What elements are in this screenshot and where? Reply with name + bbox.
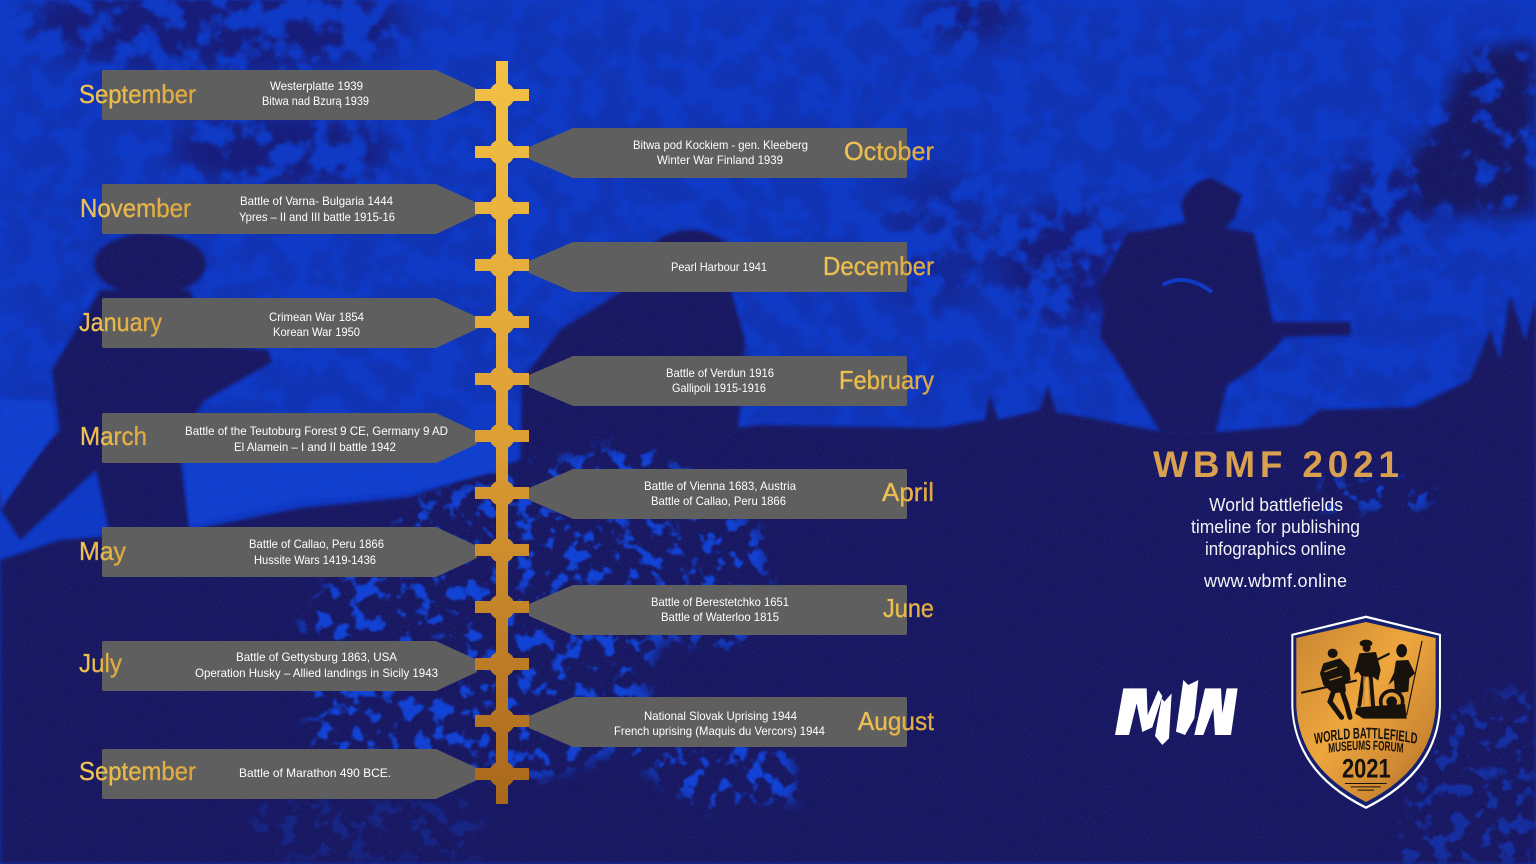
August label: French uprising (Maquis du Vercors) 1944 <box>614 724 825 738</box>
left soldier <box>1302 649 1356 717</box>
October label: Winter War Finland 1939 <box>657 153 783 167</box>
June label <box>529 585 934 635</box>
September 1939 label <box>79 70 477 120</box>
text block: description: World battlefields <box>1209 495 1343 515</box>
May label: May <box>79 536 126 566</box>
April label: Battle of Callao, Peru 1866 <box>651 494 786 508</box>
badge text: WORLD BATTLEFIELD <box>1314 728 1418 744</box>
August label: August <box>858 706 935 736</box>
June label: June <box>883 593 934 623</box>
June label: Battle of Waterloo 1815 <box>661 610 779 624</box>
October label: October <box>844 136 934 166</box>
November label: Battle of Varna- Bulgaria 1444 <box>240 194 393 208</box>
icon: three soldiers <box>1302 640 1422 719</box>
October label <box>529 128 934 178</box>
soldier silhouette: right <box>1097 178 1351 435</box>
logo: World Battlefield Museums Forum shield <box>1291 616 1441 809</box>
February label: Gallipoli 1915-1916 <box>672 381 766 395</box>
middle soldier <box>1354 640 1389 708</box>
text block: website: www.wbmf.online <box>1203 571 1347 591</box>
February label: February <box>839 365 934 395</box>
soldier silhouette: centre <box>520 230 745 470</box>
logo: MIN <box>1115 680 1238 745</box>
June label: Battle of Berestetchko 1651 <box>651 595 789 609</box>
text block: description: timeline for publishing <box>1191 517 1360 537</box>
September BCE label: Battle of Marathon 490 BCE. <box>239 766 391 780</box>
text block: description <box>1191 495 1360 559</box>
September 1939 label: Bitwa nad Bzurą 1939 <box>262 94 369 108</box>
sky clouds <box>0 0 1536 430</box>
September BCE label: September <box>79 756 196 786</box>
timeline spine with nodes <box>475 61 529 804</box>
January label <box>79 298 477 348</box>
April label <box>529 469 934 519</box>
August label: National Slovak Uprising 1944 <box>644 709 797 723</box>
September BCE label <box>79 749 477 799</box>
panel: right timeline labels <box>529 128 935 747</box>
shield body <box>1291 616 1441 809</box>
September 1939 label: Westerplatte 1939 <box>270 79 363 93</box>
April label: April <box>882 477 934 507</box>
December label: Pearl Harbour 1941 <box>671 260 767 274</box>
December label: December <box>823 251 934 281</box>
March label <box>80 413 477 463</box>
January label: Korean War 1950 <box>273 325 360 339</box>
dark ground and foliage <box>0 295 1536 864</box>
bright rocks and foliage <box>250 442 1536 864</box>
badge text: 2021 <box>1342 754 1391 784</box>
February label: Battle of Verdun 1916 <box>666 366 774 380</box>
badge text: MUSEUMS FORUM <box>1328 740 1404 753</box>
August label <box>529 697 935 747</box>
April label: Battle of Vienna 1683, Austria <box>644 479 796 493</box>
September 1939 label: September <box>79 79 196 109</box>
July label: Operation Husky – Allied landings in Sicily 1943 <box>195 666 438 680</box>
February label <box>529 356 934 406</box>
May label <box>79 527 477 577</box>
text block: description: infographics online <box>1205 539 1346 559</box>
October label: Bitwa pod Kockiem - gen. Kleeberg <box>633 138 808 152</box>
November label <box>80 184 477 234</box>
May label: Battle of Callao, Peru 1866 <box>249 537 384 551</box>
badge text <box>1314 728 1418 791</box>
title: WBMF 2021: WBMF 2021 <box>1153 444 1399 485</box>
November label: Ypres – II and III battle 1915-16 <box>239 210 395 224</box>
soldier silhouette: left <box>0 233 272 540</box>
December label <box>529 242 934 292</box>
July label: Battle of Gettysburg 1863, USA <box>236 650 397 664</box>
March label: El Alamein – I and II battle 1942 <box>234 440 396 454</box>
November label: November <box>80 193 191 223</box>
July label <box>79 641 477 691</box>
May label: Hussite Wars 1419-1436 <box>254 553 376 567</box>
right soldier <box>1355 641 1422 719</box>
March label: March <box>80 421 147 451</box>
panel: left timeline labels <box>79 70 477 799</box>
January label: January <box>79 307 162 337</box>
July label: July <box>79 648 122 678</box>
dark foliage top right <box>1400 40 1536 215</box>
March label: Battle of the Teutoburg Forest 9 CE, Germany 9 AD <box>185 424 448 438</box>
January label: Crimean War 1854 <box>269 310 364 324</box>
